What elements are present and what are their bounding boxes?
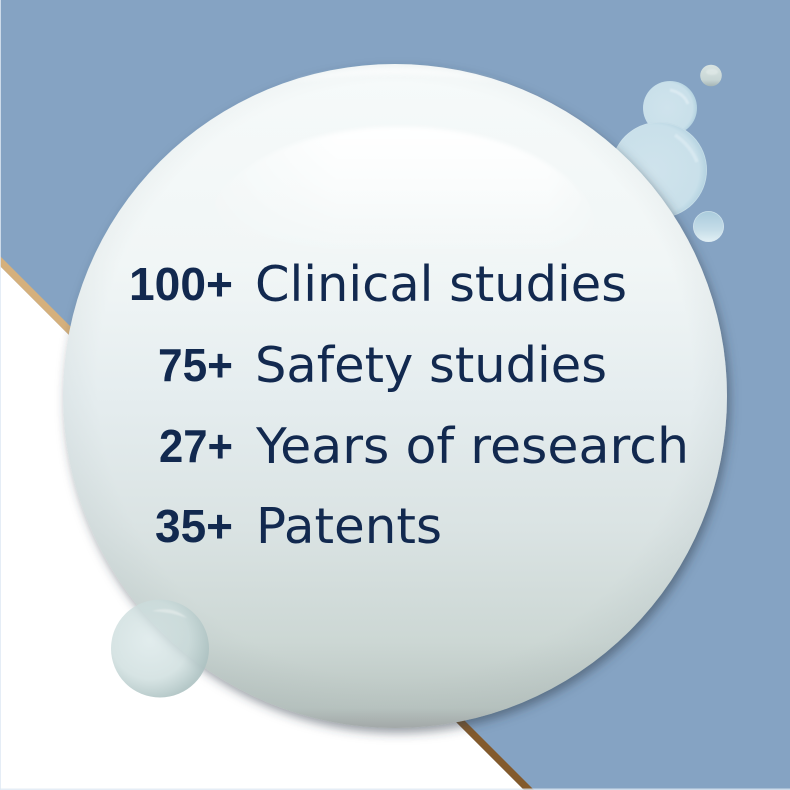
row: years of research: 27+ — [159, 420, 233, 472]
sphere rim highlight — [290, 68, 500, 82]
bubble: top small grey — [700, 65, 722, 86]
bubble: bottom left — [111, 600, 209, 698]
bubble: top medium — [643, 81, 697, 135]
stats list — [129, 256, 689, 555]
row: patents: 35+ — [155, 500, 233, 552]
row: clinical studies: 100+ — [129, 258, 233, 310]
main sphere — [63, 64, 727, 728]
bubble: small right — [693, 211, 724, 242]
row: patents — [155, 498, 442, 555]
bubble: large right — [611, 122, 707, 218]
row: years of research: Years of research — [255, 418, 689, 475]
row: safety studies: Safety studies — [255, 337, 607, 394]
background: white triangle with tan and brown edge — [0, 256, 534, 790]
sphere crescent highlight — [315, 129, 544, 168]
row: patents: Patents — [256, 498, 442, 555]
row: clinical studies: Clinical studies — [255, 256, 627, 313]
row: safety studies: 75+ — [158, 339, 233, 391]
